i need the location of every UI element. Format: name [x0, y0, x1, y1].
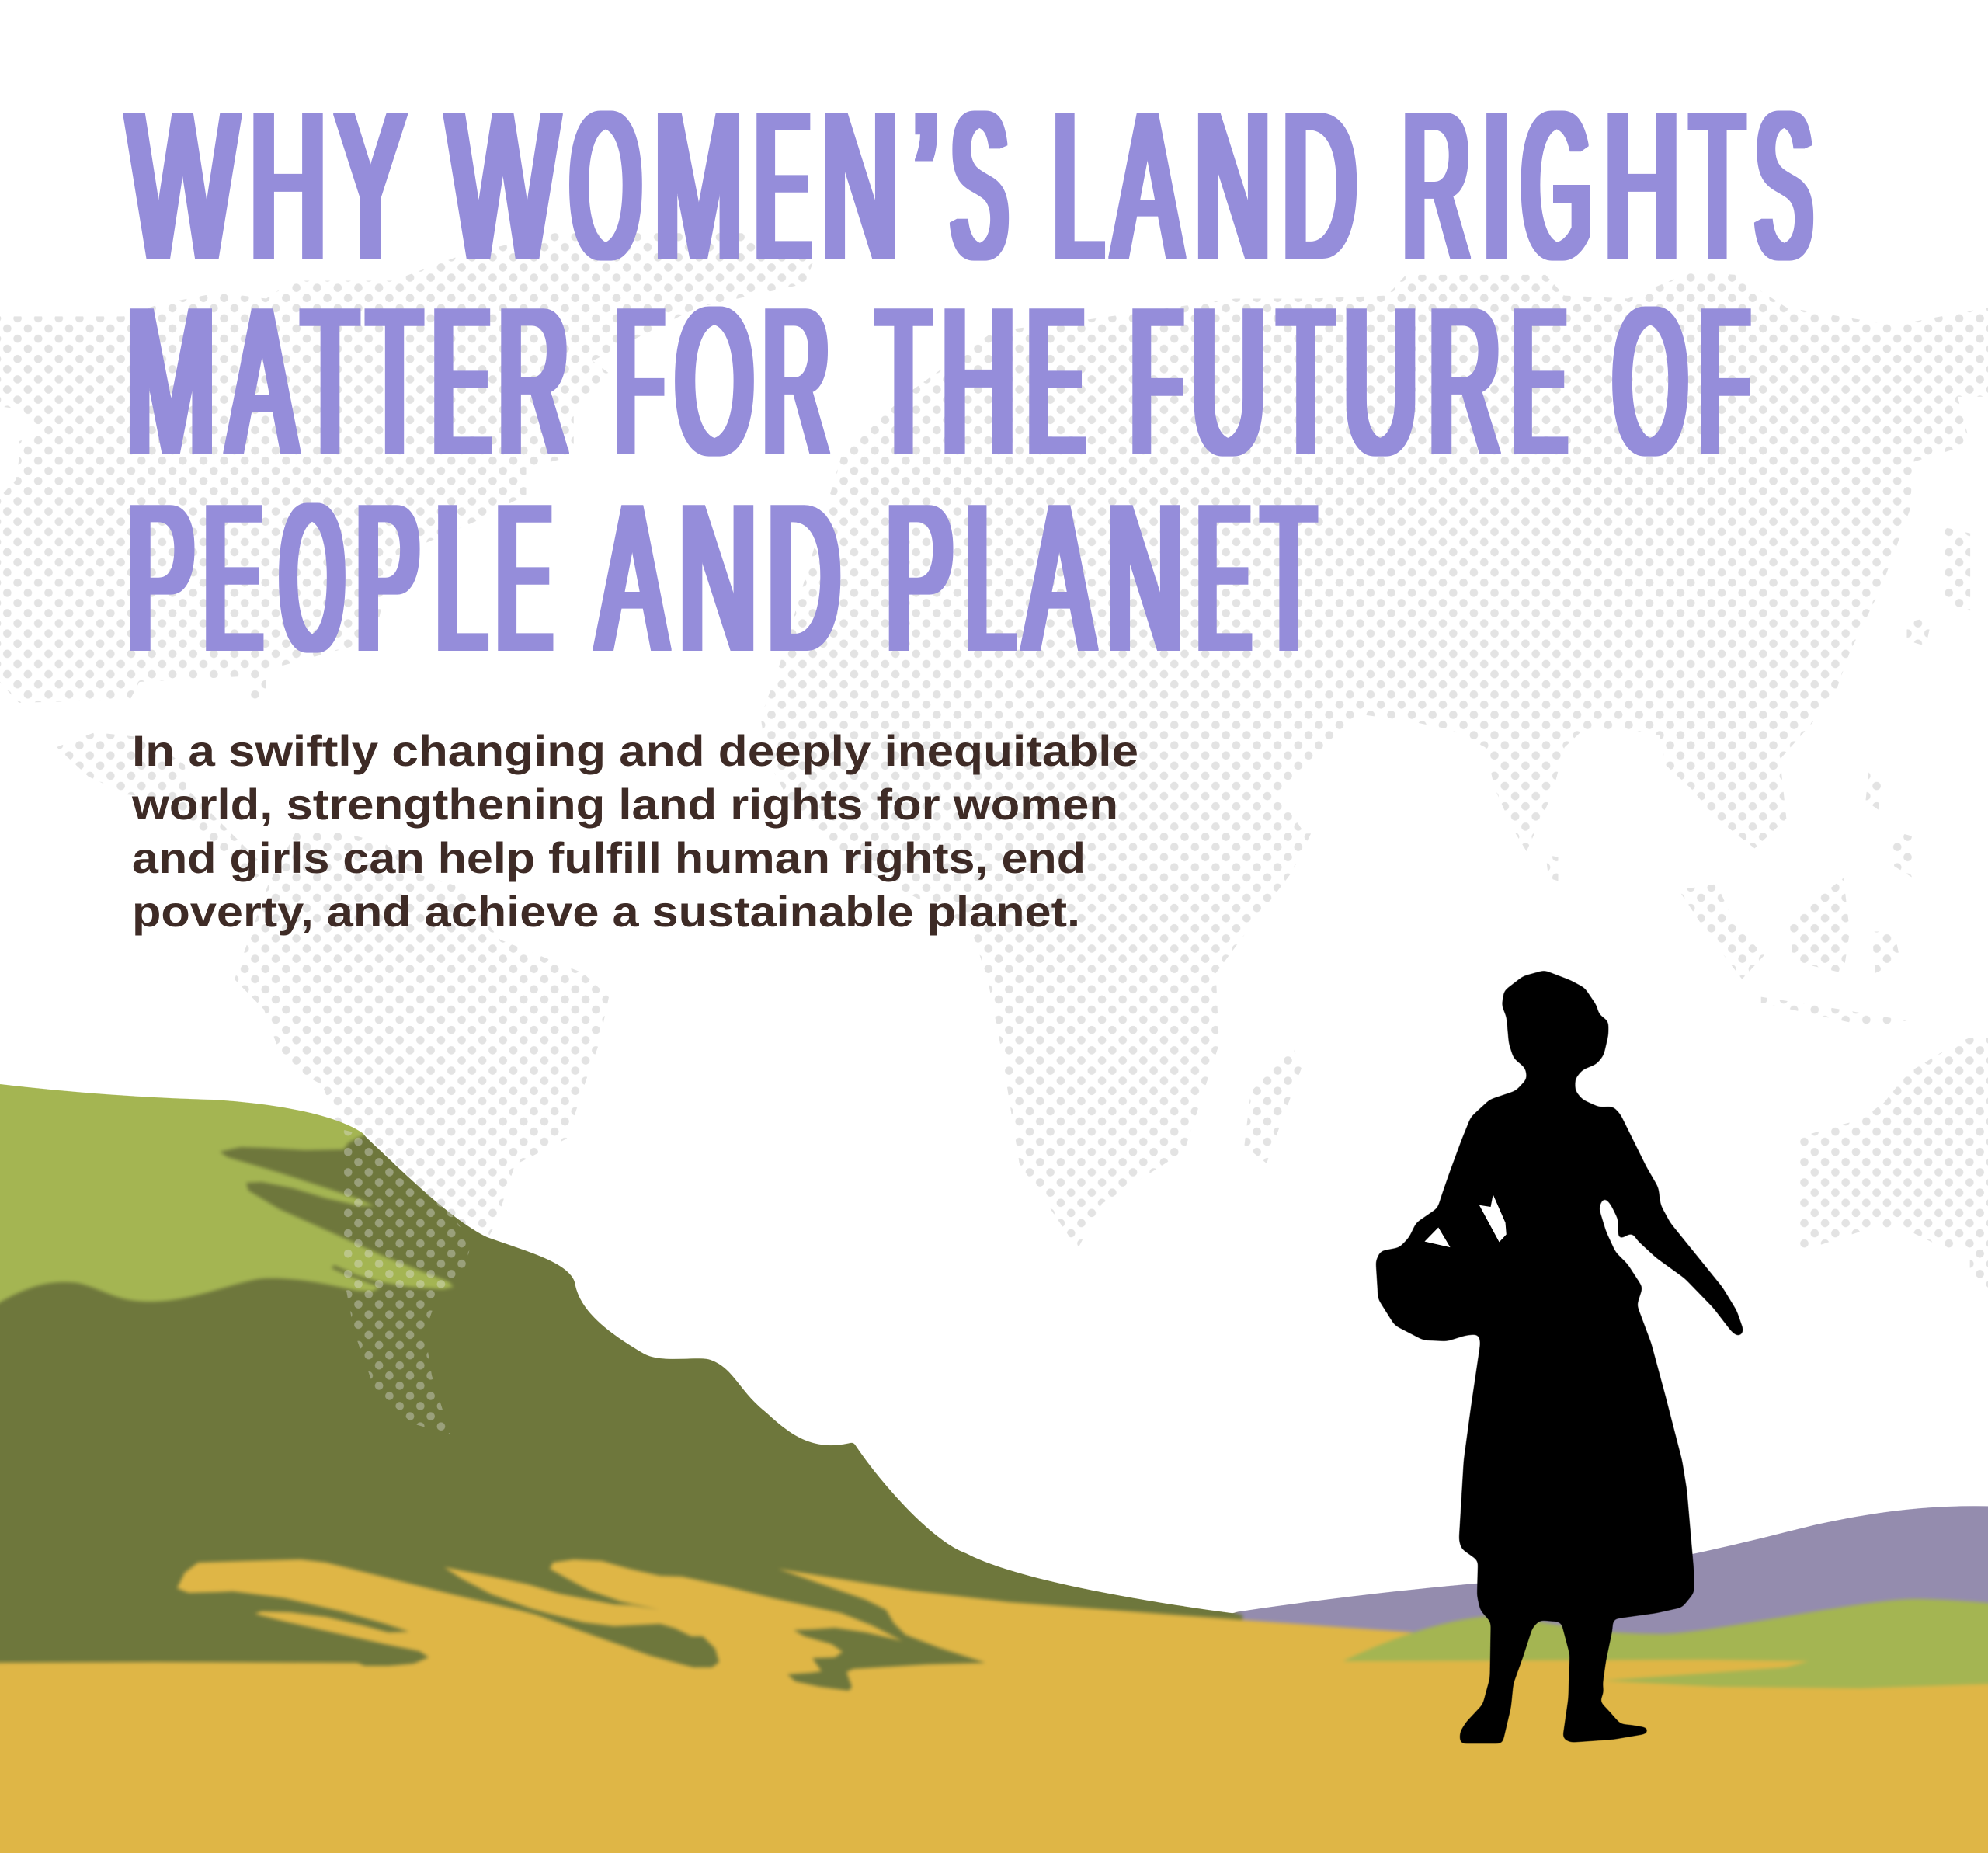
title: N	[679, 461, 756, 695]
title: E	[1513, 265, 1566, 499]
title: F	[1131, 265, 1182, 499]
title: H	[1604, 69, 1680, 303]
intro paragraph: and girls can help fulfill human rights, end	[132, 833, 1086, 882]
title: F	[1700, 265, 1749, 499]
title: E	[756, 69, 810, 303]
title: N	[822, 69, 898, 303]
title: T	[1691, 69, 1743, 303]
title: Y	[336, 69, 404, 303]
intro paragraph: In a swiftly changing and deeply inequitable	[132, 726, 1138, 775]
infographic canvas: S	[1756, 69, 1812, 303]
title: A	[1114, 69, 1182, 303]
title: T	[368, 265, 421, 499]
title: H	[942, 265, 1016, 499]
title: ’	[913, 69, 940, 303]
title: A	[1025, 461, 1094, 695]
map dots showing through the hillside	[338, 1128, 471, 1434]
title: A	[598, 461, 667, 695]
title: R	[763, 265, 829, 499]
title: S	[951, 69, 1007, 303]
title: L	[966, 461, 1014, 695]
title: M	[127, 265, 215, 499]
title: E	[1027, 265, 1084, 499]
title: E	[433, 265, 490, 499]
map: Central America	[57, 732, 268, 878]
title: L	[436, 461, 486, 695]
title: W	[128, 69, 238, 303]
woman silhouette with basket	[1375, 970, 1744, 1743]
title: R	[499, 265, 568, 499]
title: N	[1195, 69, 1270, 303]
title: E	[497, 461, 551, 695]
title: T	[878, 265, 930, 499]
title: R	[1429, 265, 1500, 499]
title: O	[570, 69, 641, 303]
title: D	[768, 461, 840, 695]
title: T	[1279, 265, 1333, 499]
title: U	[1343, 265, 1418, 499]
title: E	[204, 461, 262, 695]
intro paragraph	[131, 726, 1138, 936]
title: E	[1197, 461, 1250, 695]
distant purple hill	[1235, 1506, 1988, 1709]
title: T	[1263, 461, 1315, 695]
title: P	[356, 461, 419, 695]
title: O	[280, 461, 344, 695]
title: A	[228, 265, 297, 499]
title: P	[127, 461, 194, 695]
title: T	[303, 265, 357, 499]
title: N	[1107, 461, 1183, 695]
title: G	[1522, 69, 1591, 303]
map: Australia	[1799, 1038, 1988, 1296]
halftone world map background	[0, 233, 1988, 1434]
title	[127, 69, 1812, 695]
title: F	[616, 265, 663, 499]
title: H	[250, 69, 326, 303]
intro paragraph: world, strengthening land rights for women	[131, 780, 1118, 829]
title: I	[1482, 69, 1510, 303]
title: O	[1613, 265, 1687, 499]
map: North America	[0, 233, 815, 703]
map: Asian and Indian Ocean islands	[1244, 527, 1970, 1163]
light green far field	[1343, 1599, 1988, 1688]
title: O	[676, 265, 753, 499]
title: M	[655, 69, 742, 303]
light green hilltop	[0, 1081, 454, 1320]
title: P	[886, 461, 953, 695]
dark green hillside	[0, 1126, 1242, 1709]
title: W	[448, 69, 559, 303]
map: South America	[235, 831, 609, 1434]
map: Europe, Africa and Asia	[761, 272, 1988, 1249]
landscape hills and ground	[0, 1081, 1988, 1853]
basket handle and arm gaps	[1424, 1194, 1507, 1247]
yellow ground with shadow fingers	[0, 1559, 1988, 1853]
title: D	[1283, 69, 1357, 303]
title: R	[1402, 69, 1470, 303]
title: U	[1191, 265, 1266, 499]
title: L	[1054, 69, 1103, 303]
intro paragraph: poverty, and achieve a sustainable planet.	[132, 887, 1080, 936]
